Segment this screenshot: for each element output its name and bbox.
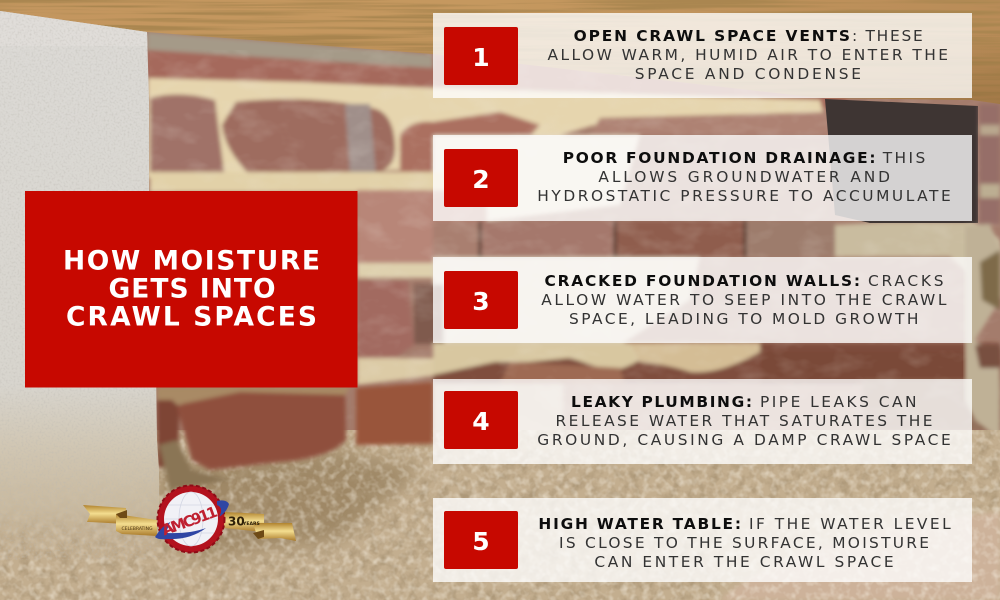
text: cracked foundation walls: ALLOW WATER TO SEEP INTO THE CRAWL — [541, 291, 947, 309]
text: high water table: CAN ENTER THE CRAWL SPACE — [594, 553, 894, 571]
text: open crawl space vents: SPACE AND CONDENSE — [635, 65, 861, 83]
text: leaky plumbing: GROUND, CAUSING A DAMP CRAWL SPACE — [537, 431, 951, 449]
text: poor foundation drainage: ALLOWS GROUNDWATER AND — [598, 168, 890, 186]
text: leaky plumbing: PIPE LEAKS CAN — [760, 393, 916, 411]
wood beam — [0, 0, 1000, 110]
text: cracked foundation walls: SPACE, LEADING TO MOLD GROWTH — [569, 310, 918, 328]
number box 1 — [444, 27, 518, 85]
gold ribbon left — [83, 505, 157, 536]
gold ribbon left: CELEBRATING — [122, 526, 153, 532]
text: open crawl space vents: OPEN CRAWL SPACE VENTS — [574, 27, 850, 45]
gold ribbon right — [224, 512, 296, 541]
text: poor foundation drainage — [537, 149, 951, 205]
text: open crawl space vents: ALLOW WARM, HUMID AIR TO ENTER THE — [548, 46, 948, 64]
number box 1: 1 — [472, 43, 490, 72]
text: poor foundation drainage: THIS — [882, 149, 925, 167]
number box 2: 2 — [472, 165, 490, 194]
AMC911 wordmark: AMC911 — [159, 503, 220, 539]
heading: HOW MOISTURE — [63, 246, 320, 276]
panel: title — [25, 191, 358, 388]
text: leaky plumbing: RELEASE WATER THAT SATURATES THE — [556, 412, 932, 430]
text: cracked foundation walls: CRACKS — [868, 272, 944, 290]
panel: step 3 — [433, 257, 972, 343]
right edge brick and stone — [965, 104, 1000, 440]
text: high water table — [538, 515, 951, 571]
blue swoosh — [155, 500, 229, 539]
panel: step 2 — [433, 135, 972, 221]
number box 4 — [444, 391, 518, 449]
text: high water table: IF THE WATER LEVEL — [749, 515, 951, 533]
gold ribbon right: 30 — [228, 514, 245, 528]
gold ribbon right: YEARS — [242, 521, 260, 527]
soil ground — [0, 430, 1000, 600]
number box 5 — [444, 511, 518, 569]
number box 3: 3 — [472, 287, 490, 316]
text: poor foundation drainage: POOR FOUNDATION DRAINAGE: — [563, 149, 876, 167]
text: cracked foundation walls — [541, 272, 947, 328]
wall mottling — [150, 50, 1000, 450]
white globe — [164, 492, 218, 546]
number box 5: 5 — [472, 527, 490, 556]
text: cracked foundation walls: CRACKED FOUNDATION WALLS: — [544, 272, 860, 290]
text: open crawl space vents — [548, 27, 948, 83]
dark vent opening — [825, 99, 978, 223]
dark red bricks at base — [157, 382, 433, 490]
red rosette — [158, 486, 224, 552]
text: leaky plumbing: LEAKY PLUMBING: — [571, 393, 752, 411]
text: open crawl space vents: : THESE — [852, 27, 923, 45]
text: leaky plumbing — [537, 393, 951, 449]
text: poor foundation drainage: HYDROSTATIC PRESSURE TO ACCUMULATE — [537, 187, 951, 205]
number box 2 — [444, 149, 518, 207]
brick courses — [147, 32, 1000, 454]
white foundation block — [0, 11, 160, 560]
panel: step 5 — [433, 498, 972, 582]
panel: step 1 — [433, 13, 972, 98]
text: high water table: IS CLOSE TO THE SURFACE, MOISTURE — [559, 534, 929, 552]
icon: AMC911 30 years badge — [83, 486, 296, 552]
number box 4: 4 — [472, 407, 490, 436]
heading — [63, 246, 320, 333]
text: high water table: HIGH WATER TABLE: — [538, 515, 741, 533]
number box 3 — [444, 271, 518, 329]
heading: CRAWL SPACES — [66, 302, 317, 333]
panel: step 4 — [433, 379, 972, 464]
heading: GETS INTO — [108, 274, 276, 304]
